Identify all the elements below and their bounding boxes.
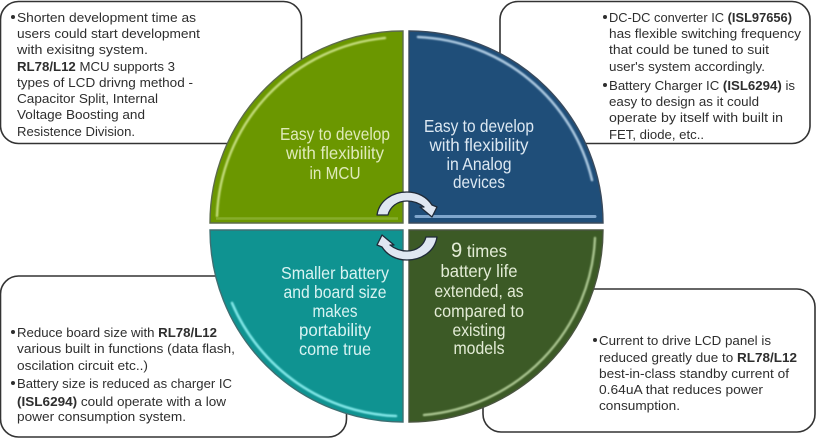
panel: battery life details callout: reduced greatly due to RL78/L12 (599, 350, 797, 365)
panel: teal quadrant, smaller battery and board size: portability (299, 320, 371, 340)
panel: MCU details callout: Capacitor Split, Internal (17, 91, 158, 106)
panel: MCU details callout: RL78/L12 MCU supports 3 (17, 59, 175, 74)
panel: battery life details callout: best-in-class standby current of (599, 366, 789, 381)
panel: battery life details callout (483, 289, 815, 432)
panel: dark green quadrant, battery life extended: extended, as (434, 281, 524, 301)
panel: teal quadrant, smaller battery and board size: and board size (284, 282, 386, 302)
panel: dark green quadrant, battery life extended: existing (452, 320, 506, 340)
panel: blue quadrant, flexibility in analog devices: Easy to develop (424, 116, 534, 136)
panel: dark green quadrant, battery life extended: compared to (434, 301, 524, 321)
panel: board size details callout: (ISL6294) could operate with a low (17, 394, 227, 409)
panel: MCU details callout: Resistence Division. (17, 124, 135, 139)
panel: green quadrant, flexibility in MCU: in MCU (310, 163, 360, 183)
panel: blue quadrant, flexibility in analog devices (409, 31, 603, 223)
panel: MCU details callout: users could start development (17, 26, 200, 41)
panel: MCU details callout: Shorten development time as (17, 10, 197, 25)
panel: board size details callout: oscilation circuit etc..) (17, 358, 148, 373)
panel: green quadrant, flexibility in MCU: with flexibility (285, 143, 384, 163)
arrow: bottom clockwise cycle arrow (377, 235, 437, 260)
panel: green quadrant, flexibility in MCU (210, 31, 403, 223)
panel: Analog details callout: operate by itself with built in (609, 110, 783, 125)
panel: Analog details callout: user's system accordingly. (609, 59, 765, 74)
arrow: top clockwise cycle arrow (377, 192, 437, 217)
panel: Analog details callout: that could be tuned to suit (609, 42, 769, 57)
panel: teal quadrant, smaller battery and board size: come true (299, 339, 371, 359)
panel: battery life details callout: 0.64uA that reduces power (599, 382, 764, 397)
panel: teal quadrant, smaller battery and board size: Smaller battery (281, 263, 389, 283)
panel: battery life details callout: Current to drive LCD panel is (599, 333, 772, 348)
panel: MCU details callout: with exisitng system. (16, 42, 148, 57)
panel: board size details callout (0, 276, 346, 437)
panel: blue quadrant, flexibility in analog devices: in Analog (446, 154, 512, 174)
panel: teal quadrant, smaller battery and board size: makes (312, 301, 358, 321)
panel: MCU details callout (0, 2, 302, 144)
panel: Analog details callout: Battery Charger IC (ISL6294) is (609, 78, 796, 93)
panel: Analog details callout: easy to design as it could (609, 94, 759, 109)
panel: green quadrant, flexibility in MCU: Easy to develop (280, 124, 390, 144)
panel: Analog details callout: has flexible switching frequency (609, 26, 802, 41)
panel: teal quadrant, smaller battery and board size (210, 230, 403, 422)
panel: Analog details callout: DC-DC converter IC (ISL97656) (609, 10, 792, 25)
panel: Analog details callout (500, 2, 810, 144)
panel: board size details callout: power consumption system. (17, 409, 186, 424)
panel: board size details callout: Battery size is reduced as charger IC (17, 376, 232, 391)
panel: MCU details callout: Voltage Boosting and (17, 107, 145, 122)
panel: board size details callout: Reduce board size with RL78/L12 (17, 325, 217, 340)
panel: dark green quadrant, battery life extended: models (454, 338, 505, 358)
panel: blue quadrant, flexibility in analog devices: devices (453, 172, 505, 192)
panel: dark green quadrant, battery life extended: battery life (440, 261, 518, 281)
panel: MCU details callout: types of LCD drivng method - (17, 75, 193, 90)
panel: dark green quadrant, battery life extended: 9 times (451, 239, 507, 262)
panel: blue quadrant, flexibility in analog devices: with flexibility (429, 135, 529, 155)
panel: Analog details callout: FET, diode, etc.. (609, 127, 704, 142)
panel: dark green quadrant, battery life extended (409, 230, 603, 422)
panel: board size details callout: various built in functions (data flash, (17, 341, 235, 356)
panel: battery life details callout: consumption. (599, 398, 680, 413)
